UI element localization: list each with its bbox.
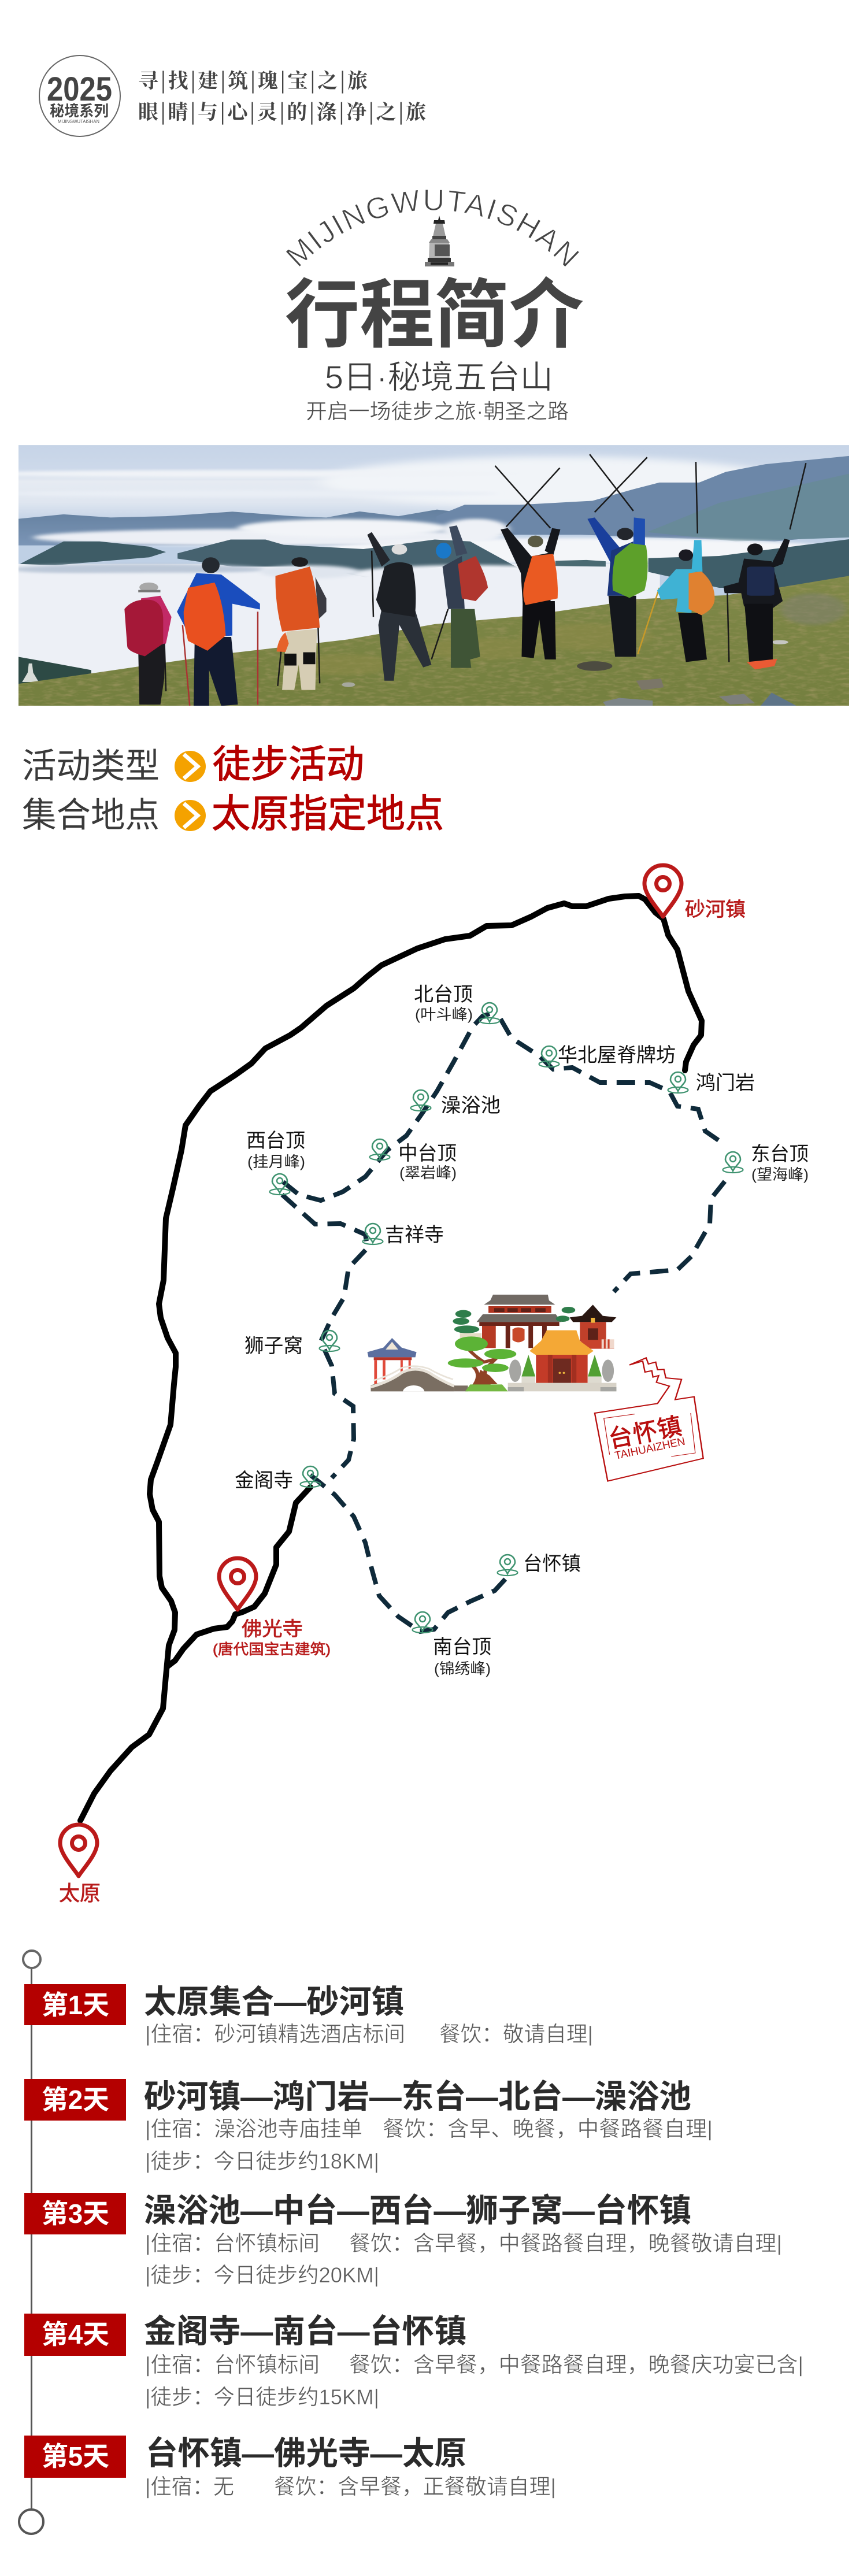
day 1: 第1天 (42, 1990, 109, 2020)
activity type label: 活动类型 (22, 747, 160, 785)
tagline (138, 65, 426, 125)
person 5: blue cap, red pack (436, 525, 488, 668)
trail: north peak to east peak (501, 1019, 722, 1143)
day 5: 台怀镇—佛光寺—太原 (146, 2435, 466, 2471)
icon: pagoda (425, 216, 454, 266)
meeting place value: 太原指定地点 (212, 792, 444, 836)
person 6: orange NH pack, arms raised (501, 528, 560, 659)
trail: north to west peak (283, 1014, 490, 1200)
stop: 澡浴池: 澡浴池 (441, 1095, 501, 1117)
day 1: |住宿：砂河镇精选酒店标间 (145, 2022, 405, 2046)
stop: 鸿门岩 (668, 1072, 755, 1094)
stop: 东台顶: 东台顶 (751, 1143, 809, 1165)
stop: 太原 (59, 1825, 101, 1905)
stop: 佛光寺: (唐代国宝古建筑) (213, 1641, 331, 1658)
logo badge (39, 55, 120, 136)
stop: 南台顶: (锦绣峰) (434, 1660, 491, 1677)
stamp: Taihuai town: TAIHUAIZHEN (614, 1436, 686, 1462)
day 5 (24, 2435, 556, 2499)
stop: 台怀镇 (497, 1553, 581, 1576)
itinerary timeline (19, 1951, 803, 2534)
trail: east peak to town (614, 1181, 725, 1292)
green cones and lions (509, 1355, 614, 1384)
day 3: 第3天 (42, 2199, 109, 2229)
day 2: |徒步：今日徒步约18KM| (145, 2149, 379, 2173)
stop: 佛光寺: 佛光寺 (242, 1618, 303, 1640)
stop: 东台顶 (722, 1143, 809, 1183)
right tower (569, 1304, 616, 1349)
bonsai pine (448, 1336, 516, 1384)
title: 行程简介 (285, 273, 584, 357)
pavilion (368, 1338, 417, 1384)
day 2: 第2天 (42, 2085, 109, 2115)
day 2 (24, 2078, 713, 2173)
stop: 狮子窝 (244, 1330, 340, 1357)
stop: 吉祥寺: 吉祥寺 (385, 1224, 444, 1246)
stop: 北台顶: (叶斗峰) (415, 1006, 473, 1023)
day 1: 太原集合—砂河镇 (144, 1984, 404, 2020)
route map (59, 865, 809, 1905)
stop: 西台顶 (246, 1130, 305, 1195)
stamp: Taihuai town (595, 1358, 703, 1481)
day 3 (24, 2192, 782, 2287)
day 5: |住宿：无 (145, 2475, 234, 2499)
subtitle: 5日·秘境五台山 (325, 359, 553, 395)
activity type value: 徒步活动 (213, 743, 364, 785)
tagline: 眼|睛|与|心|灵|的|涤|净|之|旅 (138, 97, 426, 125)
trail: Jinge temple to south peak to Taihuai (310, 1475, 509, 1632)
stop: 中台顶: (翠岩峰) (399, 1164, 457, 1181)
day 2: |住宿：澡浴池寺庙挂单 (145, 2117, 362, 2141)
stop: 砂河镇 (644, 865, 746, 921)
stop: 北台顶 (414, 984, 499, 1024)
day 2: 餐饮：含早、晚餐，中餐路餐自理| (383, 2117, 713, 2141)
person 9: dark jacket, navy pack (724, 539, 790, 669)
stop: 中台顶 (370, 1139, 457, 1181)
person 2: blue jacket, orange pack (177, 557, 260, 706)
day 4: 第4天 (42, 2319, 109, 2349)
stamp: Taihuai town: 台怀镇 (606, 1412, 684, 1453)
day 3: |徒步：今日徒步约20KM| (145, 2263, 379, 2287)
day 4: 金阁寺—南台—台怀镇 (144, 2313, 466, 2349)
stop: 西台顶: 西台顶 (246, 1130, 305, 1152)
arc heading: MIJINGWUTAISHAN (286, 190, 579, 267)
stop: 华北屋脊牌坊: 华北屋脊牌坊 (558, 1044, 676, 1066)
person 4: black pack (367, 532, 431, 681)
road: branch via Foguang temple (168, 1487, 310, 1666)
photo: trekkers above sea of clouds (0, 445, 849, 706)
logo badge: 秘境系列 (50, 102, 109, 120)
trail: west peak to Jinge temple (282, 1195, 368, 1478)
day 5: 餐饮：含早餐，正餐敬请自理| (274, 2475, 556, 2499)
stop: 北台顶: 北台顶 (414, 984, 473, 1006)
stop: 狮子窝: 狮子窝 (244, 1335, 303, 1357)
person 7: green pack, blue jacket (587, 517, 648, 657)
meeting place label: 集合地点 (22, 796, 160, 835)
stop: 南台顶: 南台顶 (433, 1636, 491, 1658)
icon: orange chevron (175, 800, 206, 831)
stop: 澡浴池 (410, 1090, 501, 1117)
person 1: crimson pack (124, 583, 172, 705)
day 4: |徒步：今日徒步约15KM| (145, 2385, 379, 2409)
tagline: 寻|找|建|筑|瑰|宝|之|旅 (138, 65, 368, 94)
tagline subtitle: 开启一场徒步之旅·朝圣之路 (306, 399, 569, 423)
day 5: 第5天 (42, 2441, 109, 2471)
day 4 (24, 2313, 803, 2409)
stop: 砂河镇: 砂河镇 (685, 899, 746, 921)
day 1 (24, 1984, 593, 2046)
day 3: 澡浴池—中台—西台—狮子窝—台怀镇 (144, 2192, 691, 2229)
logo badge: MIJINGWUTAISHAN (58, 119, 99, 124)
person 8: turquoise jacket, orange pack (657, 540, 714, 662)
stop: 东台顶: (望海峰) (751, 1166, 809, 1183)
day 3: |住宿：台怀镇标间 (145, 2232, 320, 2255)
arched bridge (371, 1366, 468, 1391)
stop: 西台顶: (挂月峰) (247, 1153, 305, 1170)
stop: 中台顶: 中台顶 (398, 1143, 457, 1165)
stop: 佛光寺 (213, 1558, 331, 1658)
stop: 台怀镇: 台怀镇 (523, 1553, 581, 1575)
stop: 南台顶 (413, 1612, 491, 1677)
stop: 金阁寺: 金阁寺 (235, 1470, 293, 1492)
person 3: orange pack, beige trousers (276, 557, 327, 690)
day 4: |住宿：台怀镇标间 (145, 2353, 320, 2377)
icon: orange chevron (175, 751, 206, 782)
day 3: 餐饮：含早餐，中餐路餐自理，晚餐敬请自理| (349, 2232, 782, 2255)
orange hall (529, 1330, 594, 1384)
stop: 金阁寺 (235, 1466, 320, 1492)
day 2: 砂河镇—鸿门岩—东台—北台—澡浴池 (144, 2078, 691, 2115)
day 1: 餐饮：敬请自理| (439, 2022, 593, 2046)
illustration: temple complex (368, 1295, 616, 1391)
stop: 鸿门岩: 鸿门岩 (696, 1072, 755, 1094)
trekking poles (164, 454, 806, 706)
stop: 太原: 太原 (59, 1881, 101, 1905)
upper hall (477, 1295, 562, 1348)
day 4: 餐饮：含早餐，中餐路餐自理，晚餐庆功宴已含| (349, 2353, 803, 2377)
paved base (465, 1383, 616, 1391)
road: main highway (80, 896, 702, 1821)
logo badge: 2025 (47, 71, 112, 108)
pine trees back (453, 1307, 575, 1333)
